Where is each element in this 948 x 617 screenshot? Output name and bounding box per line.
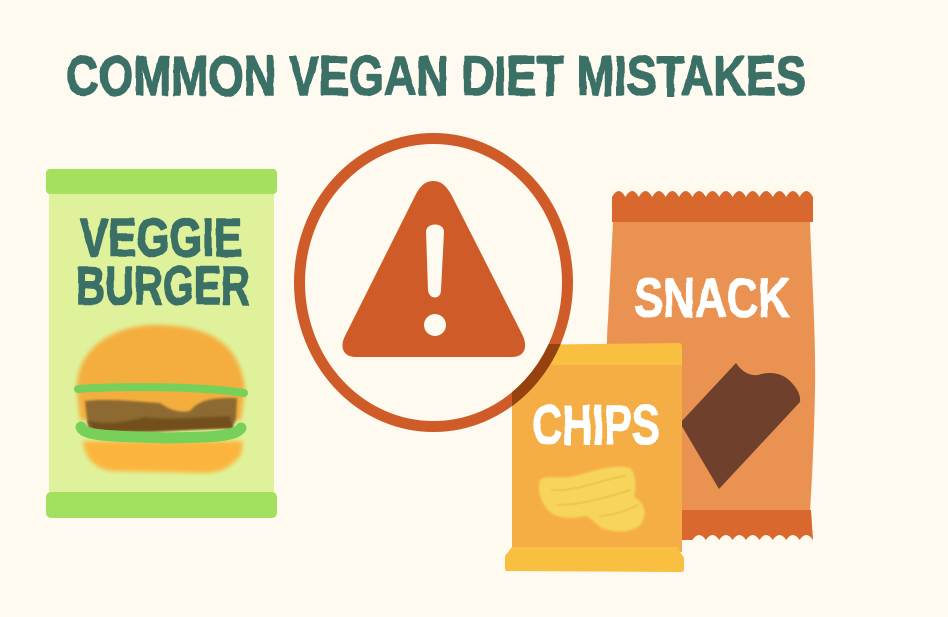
- package label: [76, 208, 250, 316]
- warning sign: [300, 138, 568, 426]
- warning circle: [300, 138, 568, 426]
- package body: [607, 222, 815, 512]
- package label: CHIPS: [532, 393, 660, 456]
- package body: [49, 185, 274, 505]
- snack package: [607, 191, 815, 540]
- package label: SNACK: [634, 266, 790, 329]
- icon: chips: [539, 467, 645, 531]
- package label: VEGGIE: [80, 208, 242, 268]
- veggie burger package: [46, 169, 277, 518]
- bottom band: [505, 547, 684, 572]
- top band: [512, 343, 682, 365]
- bottom crimp: [650, 510, 813, 540]
- package bottom band: [46, 492, 277, 518]
- icon: chocolate bar: [680, 363, 800, 489]
- icon: burger: [77, 325, 245, 473]
- top crimp: [612, 191, 813, 222]
- package body: [512, 360, 682, 552]
- package top band: [46, 169, 277, 194]
- warning triangle: [342, 181, 525, 357]
- ring overlap with chips bag: [512, 344, 561, 406]
- chips package: [505, 343, 684, 572]
- exclamation mark: [424, 224, 446, 336]
- package label: BURGER: [76, 256, 250, 316]
